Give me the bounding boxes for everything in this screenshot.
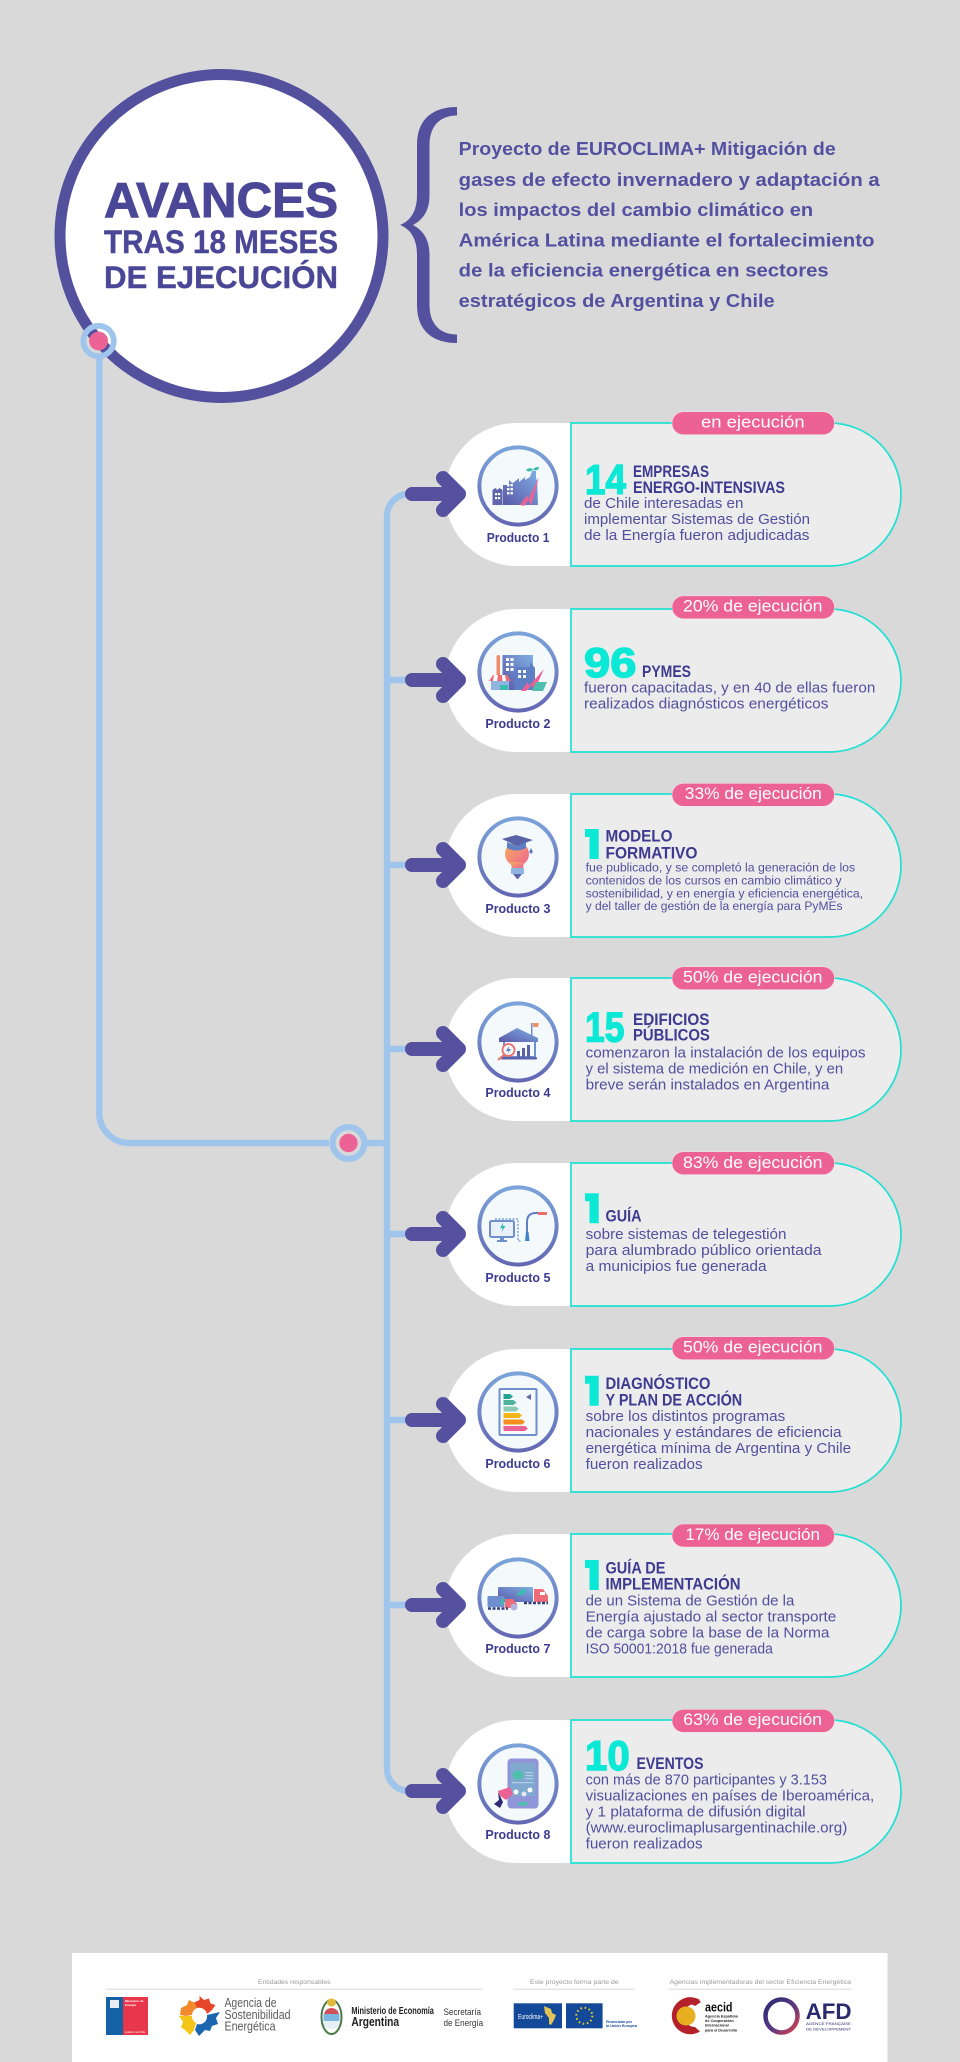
project description: Proyecto de EUROCLIMA+ Mitigación de bbox=[459, 139, 836, 159]
logo: unión europea bbox=[566, 2003, 638, 2028]
description: energética mínima de Argentina y Chile bbox=[586, 1440, 851, 1457]
logo: aecid: de Cooperación bbox=[705, 2019, 734, 2023]
heading: EVENTOS bbox=[636, 1755, 704, 1773]
badge: 83%: 83% de ejecución bbox=[683, 1154, 822, 1172]
panel: producto 8 bbox=[412, 1709, 901, 1863]
description: de carga sobre la base de la Norma bbox=[586, 1625, 830, 1642]
description bbox=[586, 1044, 866, 1093]
logo: agencia de sostenibilidad energética: Sostenibilidad bbox=[224, 2008, 291, 2022]
logo: afd: AGENCE FRANÇAISE bbox=[806, 2021, 851, 2026]
heading: IMPLEMENTACIÓN bbox=[606, 1574, 740, 1593]
label: producto 2: Producto 2 bbox=[485, 717, 550, 731]
heading: PYMES bbox=[642, 663, 691, 681]
logo: ministerio de economía argentina: Argentina bbox=[351, 2014, 400, 2029]
description: de la Energía fueron adjudicadas bbox=[584, 527, 810, 544]
label: producto 6: Producto 6 bbox=[485, 1457, 550, 1471]
heading: GUÍA DE bbox=[606, 1558, 666, 1577]
heading bbox=[633, 463, 785, 497]
icon: building and shop bbox=[479, 633, 557, 711]
description: breve serán instalados en Argentina bbox=[586, 1076, 830, 1093]
label: producto 1: Producto 1 bbox=[487, 531, 549, 545]
logo: ministerio de economía argentina: Ministerio de Economía bbox=[351, 2006, 434, 2017]
project description: estratégicos de Argentina y Chile bbox=[459, 291, 775, 311]
project description: los impactos del cambio climático en bbox=[459, 200, 813, 220]
arrow bbox=[412, 1775, 459, 1807]
label: producto 5: Producto 5 bbox=[485, 1271, 550, 1285]
logo: aecid: Agencia Española bbox=[705, 2015, 739, 2019]
logo: aecid bbox=[672, 1997, 739, 2034]
label: producto 4: Producto 4 bbox=[485, 1086, 550, 1100]
logo: unión europea: Financiado por bbox=[606, 2019, 632, 2024]
project description bbox=[459, 139, 881, 311]
description: con más de 870 participantes y 3.153 bbox=[586, 1772, 827, 1789]
logo: afd: AFD bbox=[806, 1999, 852, 2024]
arrow bbox=[412, 1033, 459, 1065]
description bbox=[584, 680, 875, 713]
heading bbox=[606, 1558, 740, 1593]
description: y el sistema de medición en Chile, y en bbox=[586, 1060, 843, 1077]
logo: ministerio de economía argentina: de Energía bbox=[444, 2018, 484, 2029]
panel: producto 7 bbox=[412, 1524, 901, 1677]
description: Energía ajustado al sector transporte bbox=[586, 1609, 836, 1626]
description: sobre sistemas de telegestión bbox=[586, 1226, 786, 1243]
description bbox=[586, 1408, 851, 1473]
logo: euroclima+ bbox=[514, 2003, 562, 2028]
project description: de la eficiencia energética en sectores bbox=[459, 261, 829, 281]
footer heading: entidades: Entidades responsables bbox=[258, 1979, 331, 1986]
description: fueron realizados bbox=[586, 1456, 703, 1473]
description: fueron realizados bbox=[586, 1836, 703, 1853]
description: implementar Sistemas de Gestión bbox=[584, 511, 810, 528]
title: de ejecución: DE EJECUCIÓN bbox=[104, 259, 338, 295]
logo: ministerio de economía argentina bbox=[322, 1998, 484, 2034]
badge: 63%: 63% de ejecución bbox=[683, 1711, 822, 1729]
logo: ministerio de energía chile: Ministerio de bbox=[125, 1999, 144, 2003]
stat: 14: 14 bbox=[585, 456, 627, 503]
icon: smartphone bbox=[479, 1745, 557, 1823]
stat: 15: 15 bbox=[585, 1004, 624, 1051]
heading: MODELO bbox=[606, 828, 673, 846]
badge: en ejecución bbox=[672, 412, 834, 435]
badge: 50% bbox=[672, 1337, 834, 1360]
description: (www.euroclimaplusargentinachile.org) bbox=[586, 1820, 847, 1837]
icon: factory bbox=[479, 447, 557, 525]
description: nacionales y estándares de eficiencia bbox=[586, 1424, 842, 1441]
heading: DIAGNÓSTICO bbox=[606, 1374, 711, 1393]
heading: EMPRESAS bbox=[633, 463, 709, 481]
badge: 50% bbox=[672, 967, 834, 990]
title: avances: AVANCES bbox=[104, 174, 338, 228]
heading: Y PLAN DE ACCIÓN bbox=[606, 1390, 742, 1409]
badge: 33% bbox=[672, 783, 834, 806]
badge: 20% bbox=[672, 596, 834, 619]
heading: GUÍA bbox=[606, 1207, 642, 1226]
description bbox=[586, 1593, 836, 1658]
stat: 96: 96 bbox=[584, 639, 636, 686]
logo: aecid: Internacional bbox=[705, 2024, 729, 2028]
description bbox=[586, 1772, 874, 1853]
node: junction ring bbox=[333, 1127, 364, 1159]
logo: unión europea: la Unión Europea bbox=[606, 2023, 638, 2028]
description: fueron capacitadas, y en 40 de ellas fueron bbox=[584, 680, 875, 697]
logo: ministerio de energía chile: Energía bbox=[125, 2003, 136, 2007]
footer panel bbox=[72, 1953, 888, 2062]
icon: trucks bbox=[479, 1559, 557, 1637]
panel: producto 6 bbox=[412, 1337, 901, 1492]
panel: producto 1 bbox=[412, 412, 901, 566]
heading bbox=[633, 1011, 710, 1045]
stat: 1 bbox=[585, 1560, 599, 1590]
title circle bbox=[60, 74, 383, 398]
description: de Chile interesadas en bbox=[584, 495, 743, 512]
logo: ministerio de economía argentina: Secretaría bbox=[444, 2007, 482, 2018]
logo: ministerio de energía chile: Gobierno de Chile bbox=[125, 2031, 146, 2034]
logo: agencia de sostenibilidad energética: Energética bbox=[224, 2020, 276, 2034]
arrow bbox=[412, 849, 459, 881]
icon: monitor and street lamp bbox=[479, 1187, 557, 1265]
brace bbox=[400, 107, 457, 343]
badge: 63% bbox=[672, 1709, 834, 1732]
project description: América Latina mediante el fortalecimiento bbox=[459, 231, 874, 251]
icon: graduation bulb bbox=[479, 818, 557, 896]
badge: en ejecución: en ejecución bbox=[701, 413, 805, 431]
description: visualizaciones en países de Iberoamérica, bbox=[586, 1788, 874, 1805]
icon: energy label bbox=[479, 1373, 557, 1451]
description: sostenibilidad, y en energía y eficiencia energética, bbox=[586, 886, 863, 900]
badge: 17% bbox=[672, 1524, 834, 1547]
badge: 50%: 50% de ejecución bbox=[683, 968, 822, 986]
badge: 50%: 50% de ejecución bbox=[683, 1339, 822, 1357]
logo: agencia de sostenibilidad energética: Agencia de bbox=[224, 1996, 277, 2010]
logo: agencia de sostenibilidad energética bbox=[179, 1996, 291, 2036]
panel: producto 5 bbox=[412, 1152, 901, 1306]
heading: ENERGO-INTENSIVAS bbox=[633, 479, 785, 497]
panel: producto 4 bbox=[412, 967, 901, 1121]
heading bbox=[606, 828, 698, 862]
arrow bbox=[412, 1404, 459, 1436]
arrow bbox=[412, 478, 459, 510]
description: comenzaron la instalación de los equipos bbox=[586, 1044, 866, 1061]
badge: 33%: 33% de ejecución bbox=[685, 785, 822, 803]
heading: PÚBLICOS bbox=[633, 1026, 710, 1045]
logo: afd bbox=[766, 1999, 852, 2032]
stat: 1 bbox=[585, 1193, 599, 1223]
stat: 10: 10 bbox=[585, 1732, 630, 1779]
arrow bbox=[412, 1589, 459, 1621]
description: y del taller de gestión de la energía para PyMEs bbox=[586, 899, 843, 913]
description: y 1 plataforma de difusión digital bbox=[586, 1804, 806, 1821]
panel: producto 3 bbox=[412, 783, 901, 937]
node: top ring bbox=[83, 326, 114, 356]
label: producto 7: Producto 7 bbox=[485, 1642, 550, 1656]
description bbox=[586, 861, 863, 913]
label: producto 8: Producto 8 bbox=[485, 1828, 550, 1842]
logo: euroclima+: Euroclima+ bbox=[518, 2014, 543, 2021]
description: de un Sistema de Gestión de la bbox=[586, 1593, 795, 1610]
heading: FORMATIVO bbox=[606, 844, 698, 862]
arrow bbox=[412, 1218, 459, 1250]
heading: EDIFICIOS bbox=[633, 1011, 710, 1029]
panel: producto 2 bbox=[412, 596, 901, 752]
description: a municipios fue generada bbox=[586, 1258, 767, 1275]
description: realizados diagnósticos energéticos bbox=[584, 696, 828, 713]
heading bbox=[606, 1374, 742, 1409]
description bbox=[584, 495, 810, 544]
logo: ministerio de energía chile bbox=[106, 1997, 148, 2035]
description bbox=[586, 1226, 822, 1275]
badge: 20%: 20% de ejecución bbox=[683, 598, 822, 616]
logo: afd: DE DÉVELOPPEMENT bbox=[806, 2027, 852, 2032]
logo: aecid: aecid bbox=[705, 2000, 733, 2015]
description: para alumbrado público orientada bbox=[586, 1242, 822, 1259]
stat: 1 bbox=[585, 829, 599, 859]
stat: 1 bbox=[585, 1376, 599, 1406]
title: tras 18 meses: TRAS 18 MESES bbox=[104, 224, 338, 260]
badge: 17%: 17% de ejecución bbox=[685, 1526, 820, 1544]
description: sobre los distintos programas bbox=[586, 1408, 785, 1425]
project description: gases de efecto invernadero y adaptación a bbox=[459, 170, 881, 190]
badge: 83% bbox=[672, 1152, 834, 1175]
label: producto 3: Producto 3 bbox=[485, 902, 550, 916]
description: fue publicado, y se completó la generación de los bbox=[586, 861, 855, 875]
icon: public building bbox=[479, 1003, 557, 1081]
footer heading: proyecto: Este proyecto forma parte de bbox=[530, 1979, 619, 1986]
arrow bbox=[412, 664, 459, 696]
footer heading: agencias: Agencias implementadoras del sector Eficiencia Energética bbox=[670, 1979, 851, 1986]
connector: main timeline line bbox=[99, 358, 412, 1791]
description: ISO 50001:2018 fue generada bbox=[586, 1641, 774, 1658]
description: contenidos de los cursos en cambio climático y bbox=[586, 873, 843, 887]
logo: aecid: para el Desarrollo bbox=[705, 2029, 738, 2033]
